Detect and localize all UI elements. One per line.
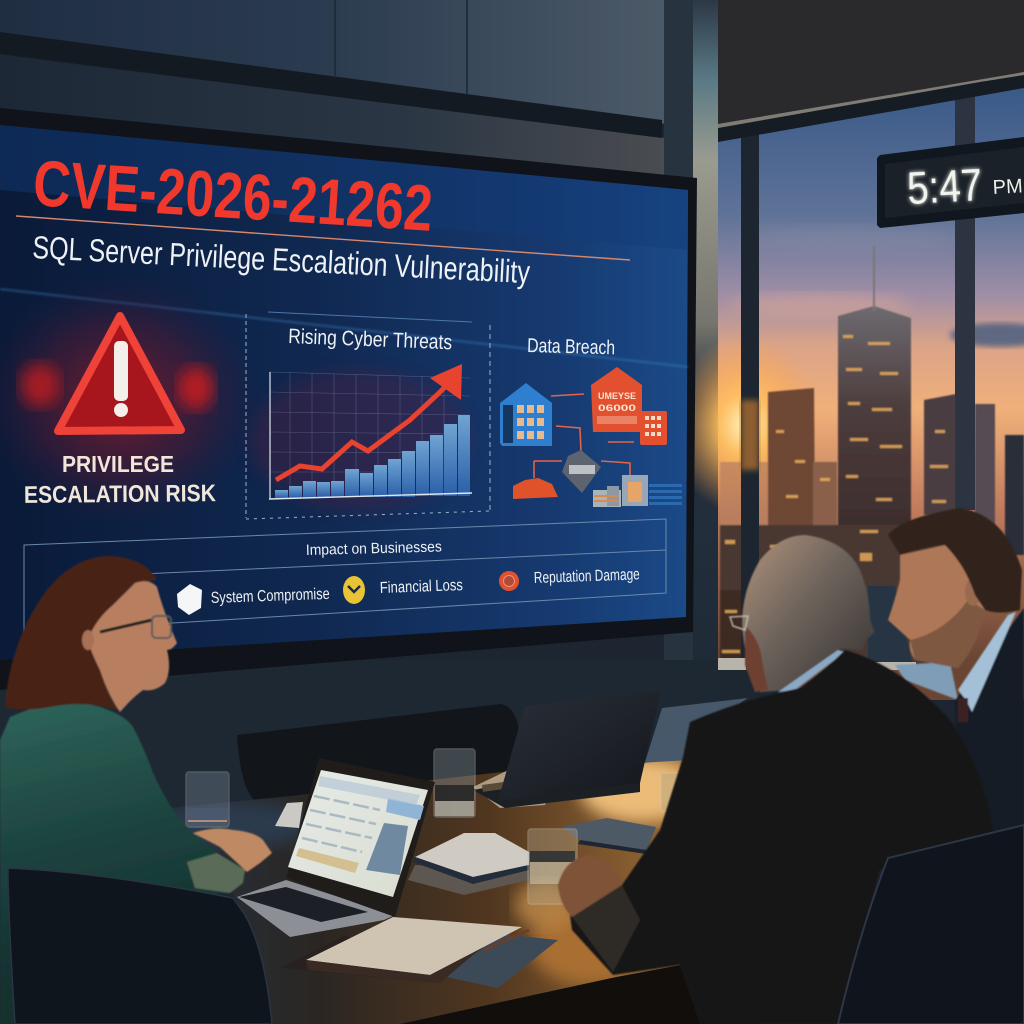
sleeve cuff <box>187 853 245 893</box>
icon: red server: 06000 <box>598 403 636 413</box>
cuff <box>572 885 640 972</box>
wall display screen <box>0 108 697 690</box>
hand <box>558 855 622 917</box>
panel: data breach <box>246 325 682 519</box>
back laptop <box>473 691 661 808</box>
foreground right chair <box>838 825 1024 1024</box>
man in back right <box>888 508 1024 840</box>
skyline buildings <box>720 246 1024 665</box>
main laptop <box>237 758 435 937</box>
head <box>742 535 875 692</box>
connectors <box>534 394 634 478</box>
ear <box>82 630 94 650</box>
left glass <box>186 772 229 827</box>
grid <box>270 372 470 497</box>
impact heading: Impact on Businesses <box>306 538 442 559</box>
back chair <box>237 704 522 804</box>
neck and ear <box>745 625 768 692</box>
glasses <box>730 616 748 630</box>
blue-grey chair behind table <box>645 698 748 768</box>
ear <box>965 578 981 606</box>
system compromise label: System Compromise <box>211 586 330 607</box>
woman presenter left <box>0 556 272 1024</box>
icon: financial loss <box>343 576 365 604</box>
icon: warning triangle <box>20 316 214 431</box>
risk label: PRIVILEGE <box>62 451 174 477</box>
right side notepad <box>562 818 656 854</box>
chart heading: Rising Cyber Threats <box>288 325 453 354</box>
panel: privilege escalation risk <box>20 316 217 509</box>
face <box>88 581 177 712</box>
window frames <box>718 72 1024 700</box>
financial loss label: Financial Loss <box>380 577 463 597</box>
panel: rising cyber threats chart <box>246 312 472 518</box>
icon: red server <box>591 367 642 432</box>
glasses <box>100 616 171 638</box>
window with city skyline at sunset <box>670 0 1024 700</box>
light blue shirt behind <box>895 662 958 700</box>
jacket <box>0 703 245 1024</box>
digital clock: PM <box>992 175 1023 199</box>
digital clock: 5:47 <box>906 159 983 214</box>
hands <box>193 829 272 872</box>
right glass <box>528 829 577 904</box>
digital clock <box>877 137 1024 228</box>
bars <box>275 415 470 498</box>
title: CVE number: CVE-2026-21262 <box>31 146 435 245</box>
tie <box>958 698 968 722</box>
icon: server stacks <box>593 475 682 507</box>
icon: orange data pile <box>513 478 558 499</box>
reputation damage label: Reputation Damage <box>534 566 640 587</box>
man in foreground right <box>558 535 995 1024</box>
small white device <box>275 802 303 828</box>
shirt collar <box>778 650 845 692</box>
foreground left chair <box>8 868 272 1024</box>
icon: grey breach hub <box>562 450 601 493</box>
icon: reputation damage <box>499 571 519 591</box>
hair <box>5 556 157 710</box>
icon: blue building <box>500 383 552 446</box>
face <box>888 545 985 668</box>
red trend arrow <box>276 364 462 480</box>
subtitle: SQL Server Privilege Escalation Vulnerability <box>32 229 531 290</box>
shirt <box>958 612 1016 712</box>
notebooks centre <box>408 833 529 895</box>
conference table <box>170 758 760 1024</box>
icon: red server: UMEYSE <box>598 391 636 401</box>
panel: privilege escalation risk: ESCALATION RISK <box>24 480 217 509</box>
icon: system compromise <box>177 584 202 615</box>
foreground notebooks <box>281 917 558 988</box>
far glass <box>661 773 679 811</box>
hair <box>888 508 1022 612</box>
panel: impact on businesses <box>24 519 666 632</box>
icon: small red keypad <box>640 411 667 445</box>
panel heading: Data Breach <box>527 335 615 359</box>
suit <box>955 608 1024 840</box>
stubble <box>910 600 985 668</box>
jacket <box>570 650 995 1024</box>
centre glass <box>434 749 475 817</box>
